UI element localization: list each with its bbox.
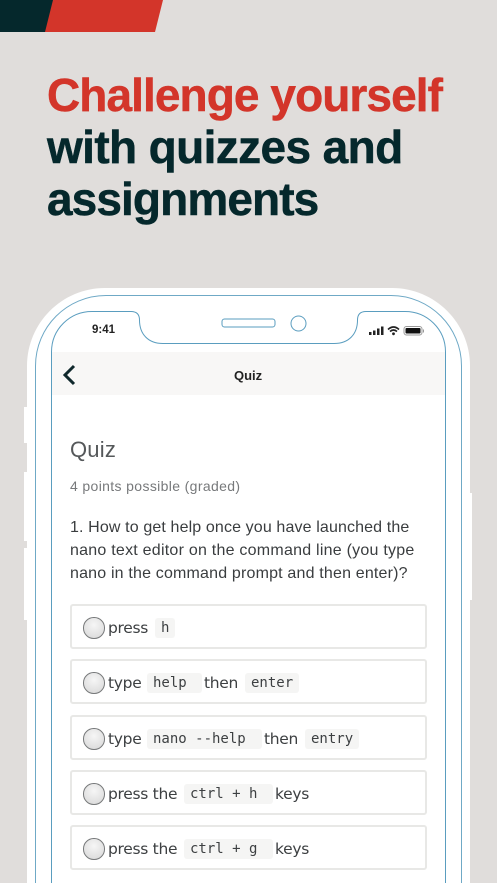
option 3: entry bbox=[311, 731, 353, 747]
icon: back chevron bbox=[63, 365, 75, 385]
option 1: press bbox=[108, 619, 148, 637]
option 2: help bbox=[153, 675, 187, 691]
option 5 bbox=[70, 825, 427, 870]
question text: nano in the command prompt and then enter)? bbox=[70, 565, 408, 582]
option 2: enter bbox=[251, 675, 293, 691]
question text bbox=[70, 519, 415, 582]
option 4: keys bbox=[275, 785, 309, 803]
option 2 bbox=[70, 659, 427, 704]
question text: 1. How to get help once you have launched the bbox=[70, 519, 409, 536]
nav bar bbox=[52, 352, 445, 395]
option 4: press the bbox=[108, 785, 177, 803]
question text: nano text editor on the command line (you type bbox=[70, 542, 415, 559]
option 3 bbox=[70, 715, 427, 760]
phone body outline bbox=[24, 288, 472, 883]
nav title: Quiz bbox=[234, 368, 262, 383]
option 2: type bbox=[108, 674, 141, 692]
option 2: then bbox=[204, 674, 238, 692]
status bar time: 9:41 bbox=[92, 324, 115, 336]
option 1 bbox=[70, 604, 427, 649]
points text: 4 points possible (graded) bbox=[70, 478, 240, 494]
option 4: ctrl + h bbox=[190, 786, 257, 802]
option 5: ctrl + g bbox=[190, 841, 257, 857]
title: assignments bbox=[47, 173, 318, 225]
top banner: red slanted block bbox=[45, 0, 163, 32]
option 3: nano --help bbox=[153, 731, 246, 747]
option 5: keys bbox=[275, 840, 309, 858]
top banner: dark block bbox=[0, 0, 54, 32]
title: Challenge yourself bbox=[47, 69, 442, 121]
option 3: then bbox=[264, 730, 298, 748]
option 5: press the bbox=[108, 840, 177, 858]
status bar icons bbox=[369, 326, 424, 336]
phone mockup bbox=[24, 288, 472, 883]
title: with quizzes and bbox=[47, 121, 403, 173]
quiz heading: Quiz bbox=[70, 437, 116, 462]
option 1: h bbox=[161, 620, 169, 636]
title bbox=[46, 69, 444, 225]
option 4 bbox=[70, 770, 427, 815]
option 3: type bbox=[108, 730, 141, 748]
